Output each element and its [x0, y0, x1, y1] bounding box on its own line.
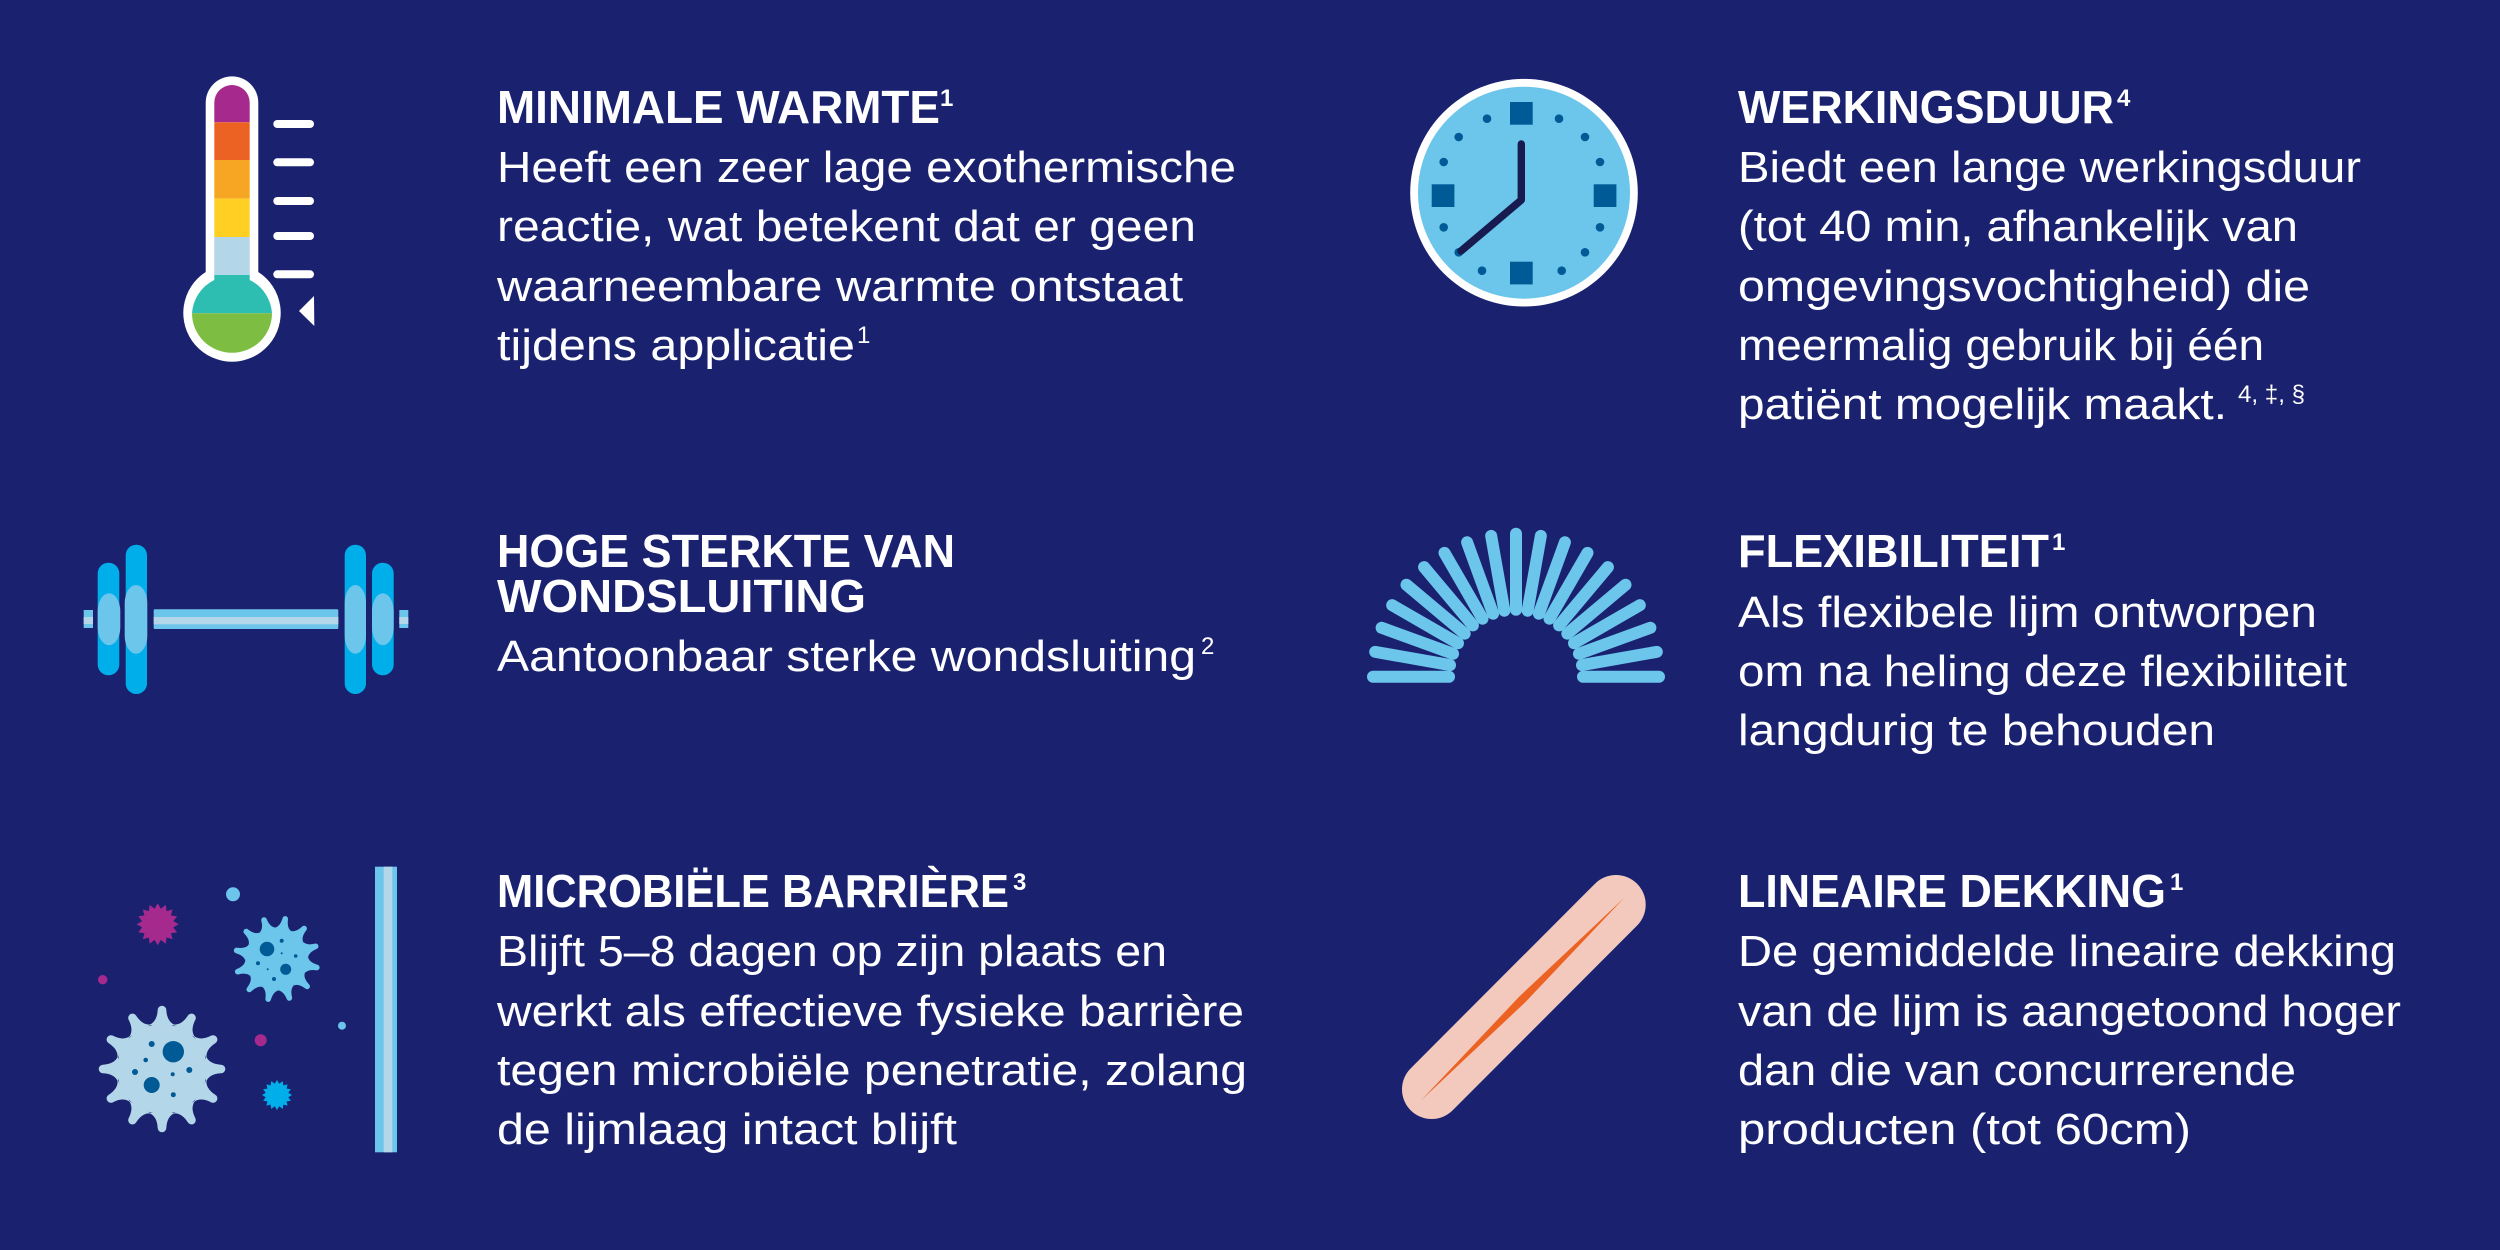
icon: microbes and barrier	[98, 867, 397, 1152]
heading: HOGE STERKTE VAN	[497, 525, 955, 577]
body text	[496, 927, 1247, 1154]
heading: FLEXIBILITEIT	[1738, 525, 2049, 577]
body text: om na heling deze flexibiliteit	[1738, 647, 2347, 696]
body text: Als flexibele lijm ontworpen	[1738, 588, 2317, 637]
body text: waarneembare warmte ontstaat	[496, 262, 1183, 311]
panel: hoge sterkte van wondsluiting	[84, 525, 1214, 694]
heading: 4	[2117, 85, 2131, 112]
body text	[1738, 588, 2347, 755]
heading: WERKINGSDUUR	[1738, 81, 2114, 133]
heading: MINIMALE WARMTE	[497, 81, 940, 133]
panel: microbiele barriere	[98, 865, 1247, 1154]
icon: flexible coil	[1373, 534, 1659, 677]
heading: 1	[2170, 869, 2183, 896]
heading: WONDSLUITING	[497, 570, 866, 622]
icon: barbell	[84, 545, 408, 694]
body text: tijdens applicatie	[497, 321, 855, 370]
body text: 2	[1201, 633, 1214, 660]
body text: Heeft een zeer lage exothermische	[497, 143, 1236, 192]
heading: 1	[940, 85, 953, 112]
body text: de lijmlaag intact blijft	[497, 1105, 957, 1154]
body text: Biedt een lange werkingsduur	[1738, 143, 2361, 192]
body text: De gemiddelde lineaire dekking	[1738, 927, 2396, 976]
heading: 3	[1013, 869, 1026, 896]
body text: tegen microbiële penetratie, zolang	[497, 1046, 1247, 1095]
heading: MICROBIËLE BARRIÈRE	[497, 865, 1009, 917]
body text: producten (tot 60cm)	[1738, 1105, 2191, 1154]
body text	[1738, 143, 2361, 429]
body text: 4, ‡, §	[2238, 381, 2305, 408]
panel: lineaire dekking	[1421, 865, 2401, 1154]
body text: omgevingsvochtigheid) die	[1738, 262, 2310, 311]
heading: LINEAIRE DEKKING	[1738, 865, 2166, 917]
body text: langdurig te behouden	[1738, 706, 2215, 755]
panel: werkingsduur	[1410, 79, 2361, 429]
icon: wound with adhesive	[1421, 898, 1624, 1101]
body text: Aantoonbaar sterke wondsluiting	[497, 632, 1196, 681]
body text	[496, 143, 1236, 370]
icon: clock	[1410, 79, 1638, 306]
icon: thermometer	[183, 76, 314, 362]
panel: flexibiliteit	[1373, 525, 2347, 755]
panel: minimale warmte	[183, 76, 1236, 370]
body text: dan die van concurrerende	[1738, 1046, 2296, 1095]
heading	[497, 525, 955, 622]
body text: 1	[857, 322, 870, 349]
body text	[1738, 927, 2401, 1154]
body text: meermalig gebruik bij één	[1738, 321, 2264, 370]
heading: 1	[2052, 529, 2065, 556]
body text: van de lijm is aangetoond hoger	[1738, 987, 2401, 1036]
body text: reactie, wat betekent dat er geen	[497, 202, 1196, 251]
body text: (tot 40 min, afhankelijk van	[1738, 202, 2298, 251]
body text: Blijft 5–8 dagen op zijn plaats en	[497, 927, 1167, 976]
body text: patiënt mogelijk maakt.	[1738, 380, 2227, 429]
body text: werkt als effectieve fysieke barrière	[496, 987, 1244, 1036]
